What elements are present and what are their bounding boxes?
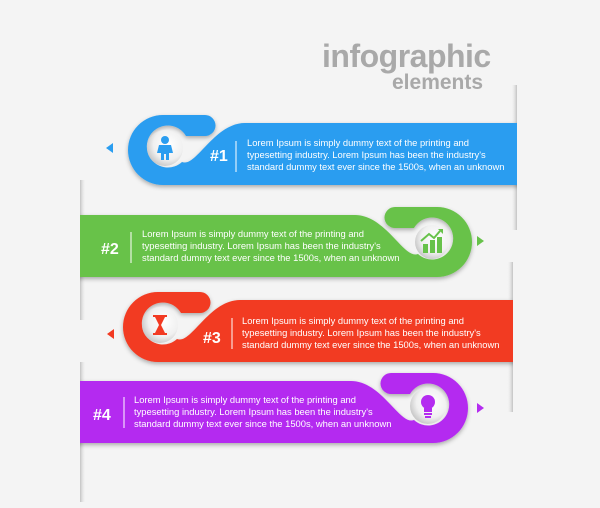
label #2: #2 (101, 241, 119, 258)
ribbon 4: purple (73, 373, 484, 443)
label #1: #1 (210, 148, 228, 165)
title: elements (392, 71, 483, 94)
icon: chart (415, 225, 449, 259)
page slit shadows (80, 85, 517, 502)
text block 3: typesetting industry. Lorem Ipsum has been the industry's (242, 327, 481, 338)
label #3: #3 (203, 330, 221, 347)
title (322, 38, 491, 94)
text block 4 (134, 394, 391, 429)
text block 1: Lorem Ipsum is simply dummy text of the printing and (247, 137, 469, 148)
arrow 3 (107, 329, 114, 339)
text block 2: standard dummy text ever since the 1500s, when an unknown (142, 252, 399, 263)
title: infographic (322, 38, 491, 74)
arrow 2 (477, 236, 484, 246)
ribbon 1: blue (106, 115, 523, 185)
arrow 4 (477, 403, 484, 413)
text block 4: standard dummy text ever since the 1500s, when an unknown (134, 418, 391, 429)
text block 3 (242, 315, 499, 350)
ribbon 2: green (77, 207, 484, 277)
icon: hourglass (142, 307, 178, 343)
label #4: #4 (93, 407, 111, 424)
text block 2: typesetting industry. Lorem Ipsum has been the industry's (142, 240, 381, 251)
text block 4: typesetting industry. Lorem Ipsum has been the industry's (134, 406, 373, 417)
text block 3: Lorem Ipsum is simply dummy text of the printing and (242, 315, 464, 326)
arrow 1 (106, 143, 113, 153)
ribbon 3: red (107, 292, 518, 362)
text block 2 (142, 228, 399, 263)
text block 1: typesetting industry. Lorem Ipsum has been the industry's (247, 149, 486, 160)
text block 4: Lorem Ipsum is simply dummy text of the printing and (134, 394, 356, 405)
text block 1 (247, 137, 504, 172)
icon: person (147, 130, 183, 166)
icon: light bulb (410, 388, 446, 424)
text block 3: standard dummy text ever since the 1500s, when an unknown (242, 339, 499, 350)
text block 1: standard dummy text ever since the 1500s, when an unknown (247, 161, 504, 172)
text block 2: Lorem Ipsum is simply dummy text of the printing and (142, 228, 364, 239)
